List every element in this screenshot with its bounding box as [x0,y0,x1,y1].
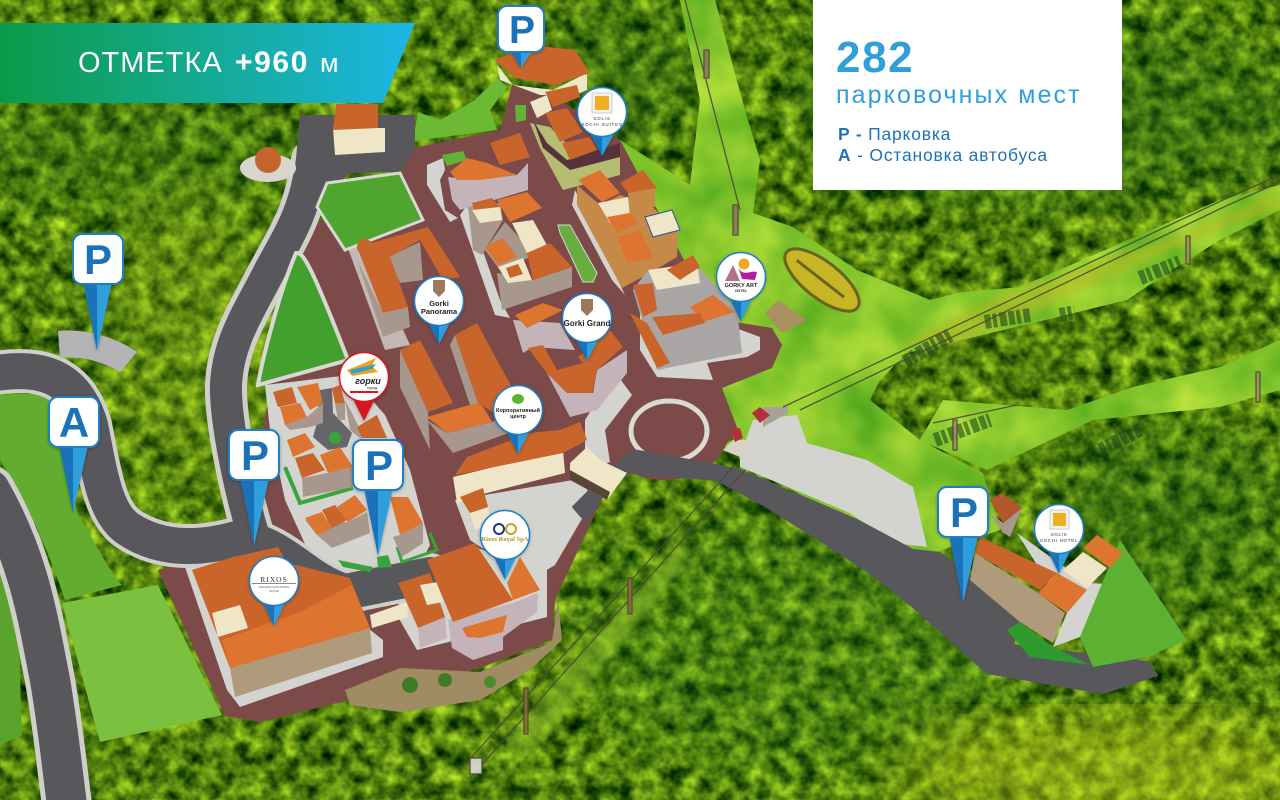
garden maze [775,238,869,322]
pin: Gorky Gorod red: город [367,385,378,390]
banner: elevation: +960 [235,46,309,79]
cableway stations [723,407,788,457]
legend: bus stop: A - Остановка автобуса [838,145,1048,165]
pin: Gorky Art Hotel [716,252,766,322]
pin: Gorki Panorama: Gorki [429,299,449,308]
pin: parking centre-left: P [241,432,269,479]
building: gazebo [240,147,296,182]
legend: parking: P - Парковка [838,124,951,144]
building: top north [333,104,385,155]
pin: Gorki Panorama: Panorama [421,307,458,316]
pin: Corporate centre [494,386,542,454]
pin: parking top-left [73,234,123,351]
building: townhouses north [273,383,387,497]
roundabout [601,380,729,480]
hut [765,300,807,333]
pavements around the buildings [185,158,1130,707]
building: Gorki Grand [513,303,627,417]
building: Rixos Royal [398,543,540,660]
pin: Rixos: SOCHI [269,589,279,593]
pin: bus stop A: A [59,399,89,446]
pin: Solis Sochi Suites: SOLIS [593,116,611,121]
meadow: ski slope [415,0,1280,754]
parking lot arc [58,331,137,372]
conifer clusters on the slope [905,262,1180,450]
building: pale crescent [448,133,530,210]
pin: Gorky Gorod red: горки [355,376,381,386]
building: resort centre [453,422,627,530]
parking count: 282 [836,33,914,82]
pin: Solis Sochi Hotel [1034,504,1084,574]
pin: parking east: P [950,489,978,536]
pin: Rixos: KRASNAYA POLYANA [259,585,289,589]
green squares and hedges [258,105,1187,667]
pin: Solis Sochi Hotel: SOLIS [1051,532,1067,537]
road: east road [573,450,1157,693]
building: north-west wing [357,227,460,337]
pin: Rixos: RIXOS [260,575,288,584]
pin: Solis Sochi Hotel: SOCHI HOTEL [1040,538,1078,543]
buildings: hotel quarter [192,45,1123,712]
pin: parking centre [353,440,403,556]
pin: Corporate centre: центр [510,414,527,420]
pin: bus stop A [49,397,99,513]
pin: Gorky Gorod red [340,352,388,421]
pin: Gorki Grand: Gorki Grand [564,319,610,328]
pin: Corporate centre: Корпоративный [496,407,540,414]
pin: parking top-left: P [84,236,112,283]
pin: parking top [498,6,544,68]
rocky cliff [345,600,562,712]
roads [0,160,430,800]
banner: elevation: м [320,48,339,78]
building: Solis suites [530,85,620,190]
road: top parking area [290,115,415,235]
pin: Rixos Royal SpA: Rixos Royal SpA [482,536,529,543]
pin: Gorki Panorama [414,276,464,344]
pin: parking centre: P [365,442,393,489]
pin: parking east [938,487,988,603]
brick pedestrian area [158,85,782,722]
building: long roof east [450,323,517,415]
pin: Gorky Art Hotel: HOTEL [735,289,748,293]
pin: Rixos Royal SpA [480,510,530,580]
parking caption: парковочных мест [836,81,1082,109]
building: centre north block [468,192,572,310]
pin: parking top: P [509,9,535,52]
building: north terminal [495,45,590,95]
building: long roof west [400,340,517,453]
building: townhouses south [305,495,423,557]
building: large east block [577,170,680,288]
pin: Gorki Grand [562,294,612,361]
panel: parking legend [813,0,1122,190]
pin: Solis Sochi Suites [578,88,626,156]
grass: left lawns [0,394,222,745]
building: Solis Sochi Hotel [970,493,1123,643]
pin: Gorky Art Hotel: GORKY ART [725,283,758,289]
building: Rixos [192,547,408,697]
pin: Rixos [250,556,298,626]
building: east block by Gorky Art [630,255,742,370]
cableways [460,0,1280,778]
banner: elevation: ОТМЕТКА [78,47,223,79]
banner: elevation [0,23,415,103]
pin: Solis Sochi Suites: SOCHI SUITES [581,122,623,127]
pin: parking centre-left [229,430,279,546]
